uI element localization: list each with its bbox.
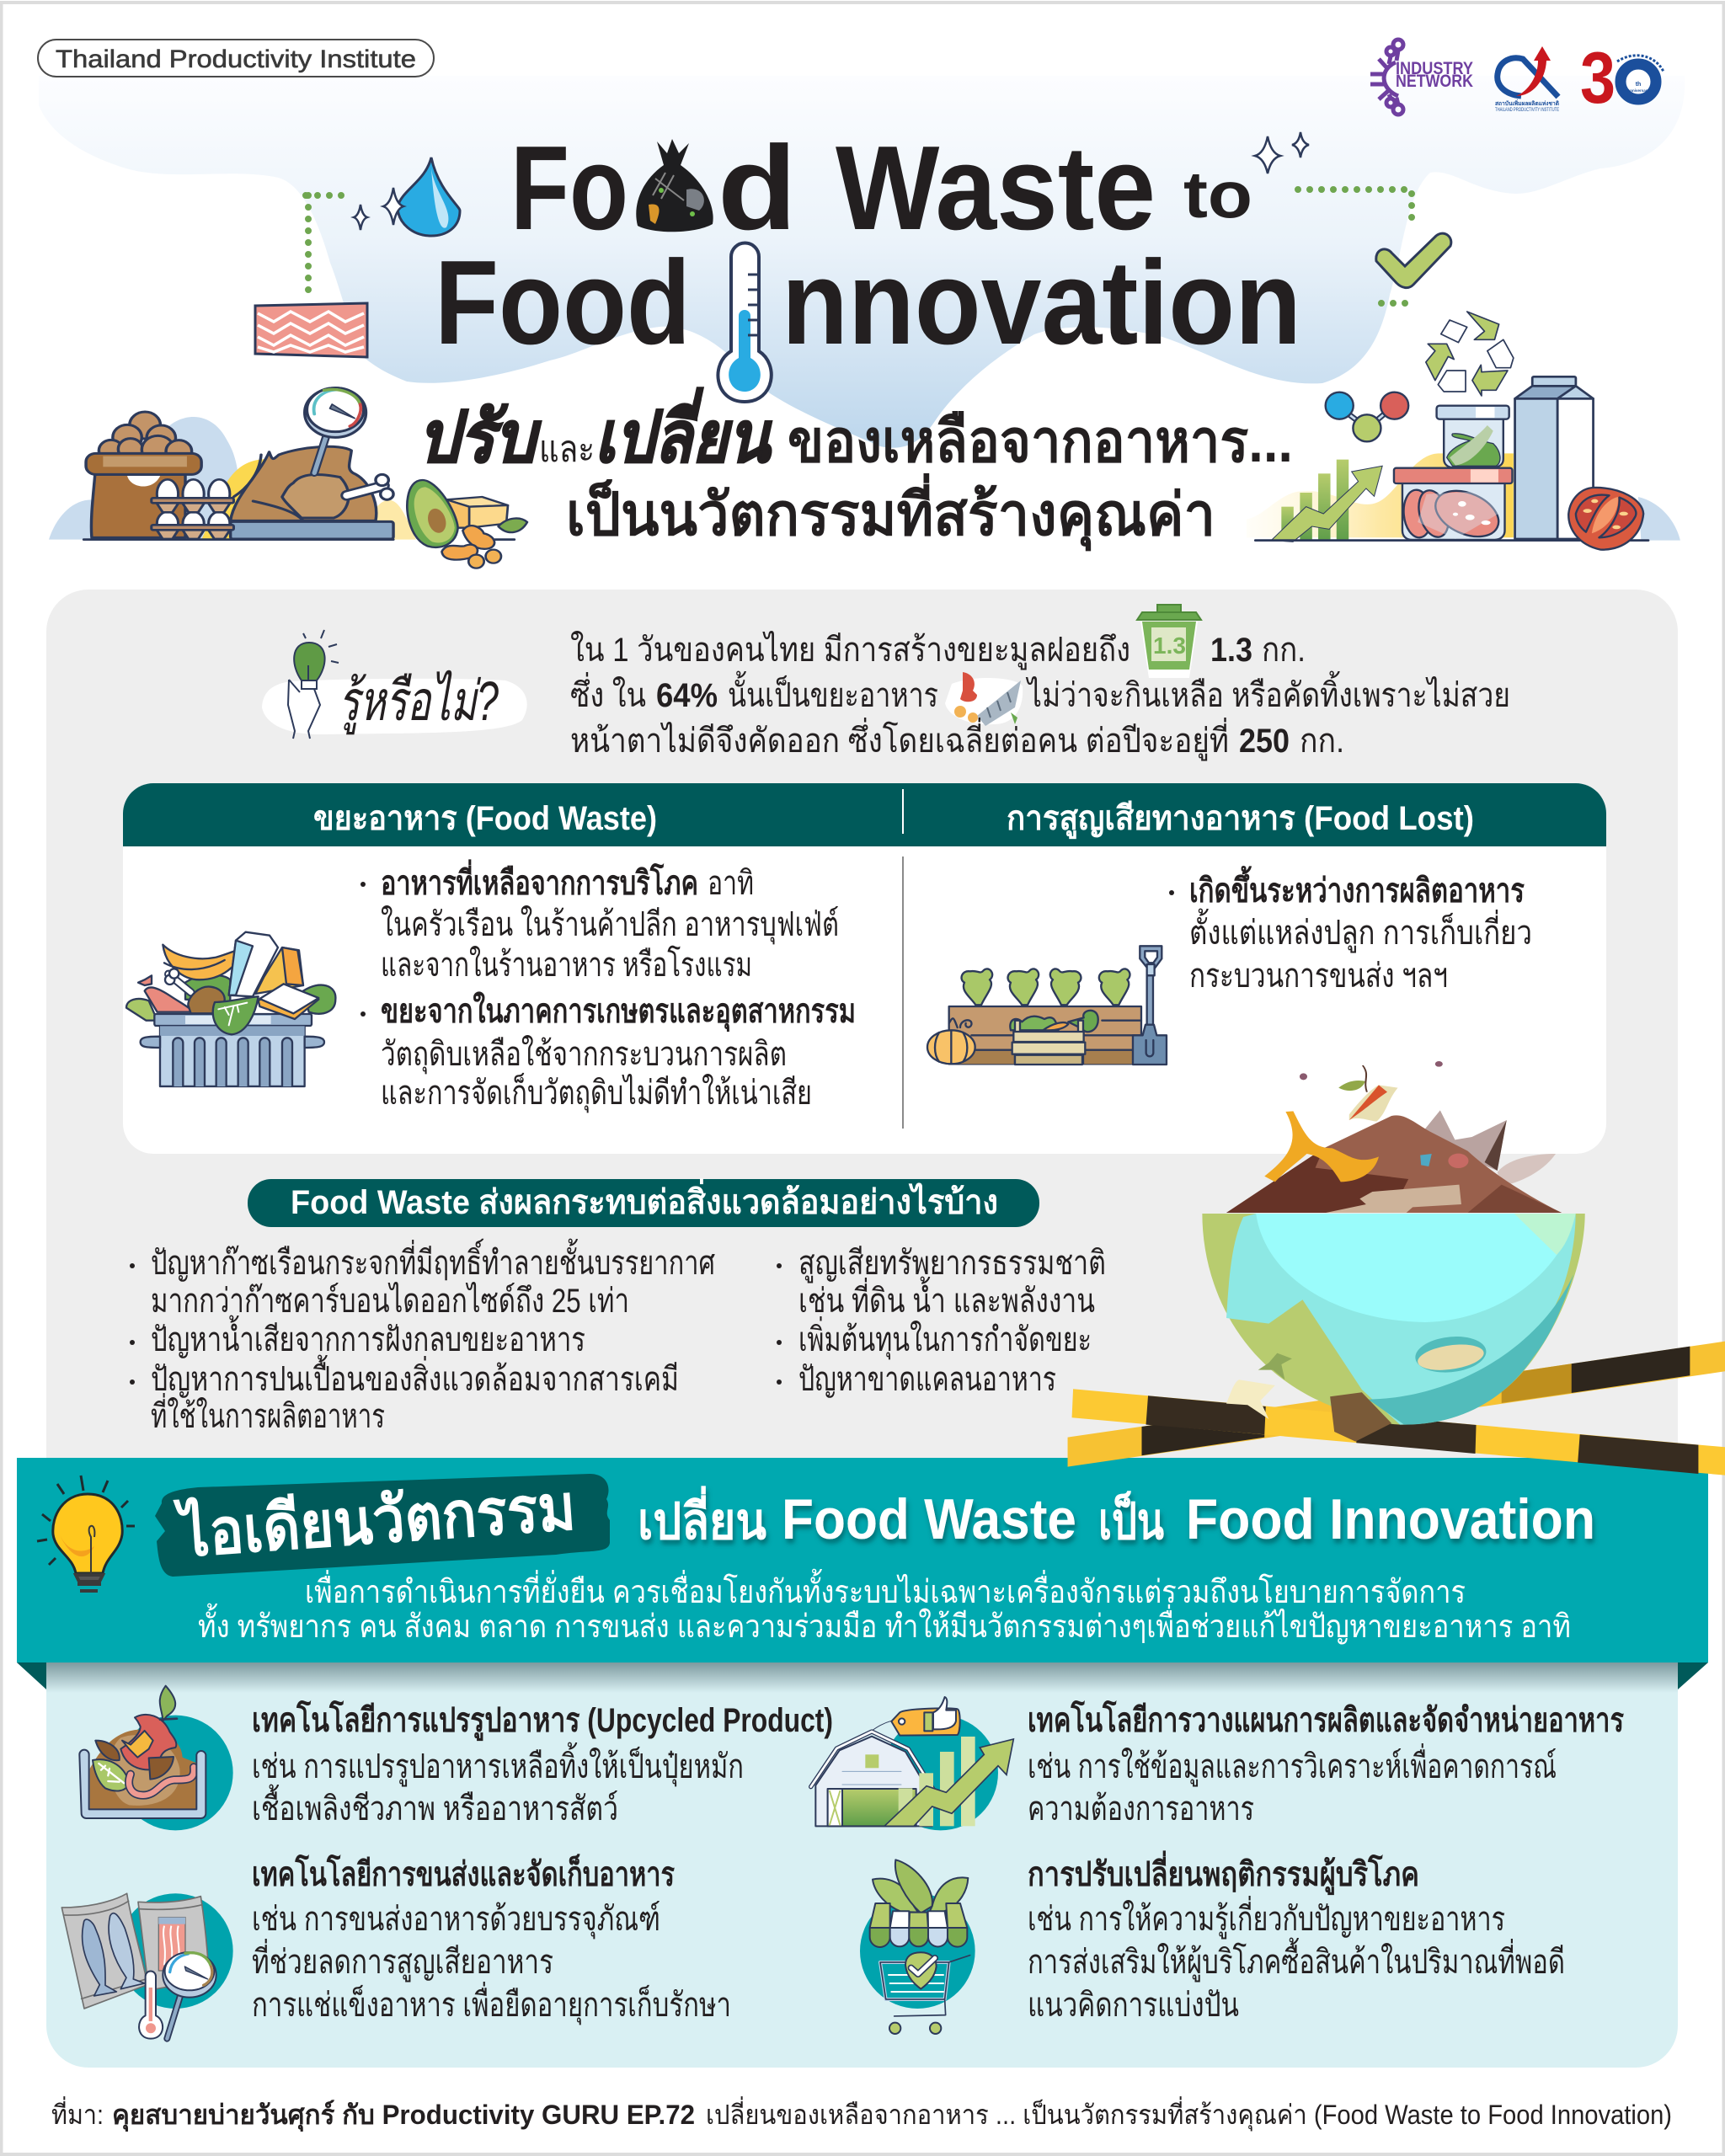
- headline thai line 1: ของเหลือจากอาหาร...: [788, 408, 1293, 474]
- impact list right: [777, 1245, 1106, 1398]
- fact line 3: กก.: [1300, 723, 1344, 760]
- bowl: [1202, 1214, 1585, 1442]
- icon: food scraps: [945, 672, 1023, 726]
- text: transport and storage: เทคโนโลยีการขนส่งและจัดเก็บอาหาร: [252, 1853, 675, 1893]
- title line 1: d: [718, 121, 797, 255]
- fact 1.3 kg: [1210, 632, 1306, 669]
- title line 1: Fo: [510, 121, 628, 255]
- text: upcycled product: [252, 1700, 833, 1828]
- did you know badge: รู้หรือไม่?: [339, 670, 499, 735]
- institute name pill: [38, 40, 434, 77]
- fact 1.3 kg: 1.3: [1210, 632, 1252, 669]
- fact line 2: 64%: [656, 677, 718, 714]
- title line 1: to: [1183, 157, 1252, 232]
- logo: industry network: INDUSTRY: [1396, 59, 1473, 78]
- logo: 30th anniversary: Anniversary: [1627, 88, 1650, 93]
- icon: sparkles top right: [1255, 132, 1309, 173]
- icon: compost tray: [79, 1686, 233, 1830]
- text: food waste definitions: วัตถุดิบเหลือใช้จากกระบวนการผลิต: [381, 1034, 787, 1075]
- panel: food waste vs food lost: [123, 783, 1606, 1154]
- fact line 3: 250: [1239, 723, 1290, 760]
- sack of grain: [86, 412, 201, 537]
- fact line 2: ซึ่ง ใน: [570, 672, 646, 714]
- egg tray: [152, 479, 233, 539]
- banner heading: เปลี่ยน: [638, 1486, 766, 1550]
- heading: food lost: การสูญเสียทางอาหาร (Food Lost): [1007, 800, 1474, 839]
- jar with sausage: [1394, 468, 1512, 546]
- teal banner: [17, 1458, 1708, 1662]
- dotted connector right: [1298, 189, 1417, 303]
- institute name pill: Thailand Productivity Institute: [56, 45, 416, 73]
- front chopstick: [1072, 1389, 1725, 1476]
- recycle symbol: [1426, 312, 1514, 396]
- icon: barn and growth: [811, 1697, 1013, 1830]
- headline thai line 2: เป็นนวัตกรรมที่สร้างคุณค่า: [566, 472, 1215, 552]
- banner heading: [638, 1486, 1595, 1551]
- source credit: [51, 2096, 1672, 2132]
- impact list right: เพิ่มต้นทุนในการกำจัดขยะ: [798, 1316, 1092, 1360]
- molecule: [1326, 392, 1408, 441]
- source credit: ที่มา:: [51, 2096, 104, 2130]
- logo: 30th anniversary: [1580, 38, 1664, 119]
- logo: thailand productivity institute: THAILAND PRODUCTIVITY INSTITUTE: [1495, 108, 1559, 113]
- text: consumer behavior: เช่น การให้ความรู้เกี่ยวกับปัญหาขยะอาหาร: [1028, 1896, 1505, 1939]
- scene: products on the right: [1247, 312, 1680, 550]
- impact list right: สูญเสียทรัพยากรธรรมชาติ: [798, 1245, 1106, 1283]
- banner body line 1: เพื่อการดำเนินการที่ยั่งยืน ควรเชื่อมโยงกันทั้งระบบไม่เฉพาะเครื่องจักรแต่รวมถึงนโยบายการจัดการ: [305, 1568, 1466, 1610]
- badge: innovation ideas: ไอเดียนวัตกรรม: [173, 1470, 578, 1571]
- fact line 3: หน้าตาไม่ดีจึงคัดออก ซึ่งโดยเฉลี่ยต่อคน ต่อปีจะอยู่ที่: [570, 718, 1229, 760]
- icon: packaged fish and gauge: [61, 1893, 233, 2039]
- text: food waste definitions: อาหารที่เหลือจากการบริโภค: [381, 859, 698, 902]
- impact list left: ปัญหาก๊าซเรือนกระจกที่มีฤทธิ์ทำลายชั้นบรรยากาศ: [151, 1238, 715, 1282]
- text: upcycled product: เช่น การแปรรูปอาหารเหลือทิ้งให้เป็นปุ๋ยหมัก: [252, 1742, 744, 1787]
- impact list left: ที่ใช้ในการผลิตอาหาร: [151, 1393, 385, 1435]
- source credit: คุยสบายบ่ายวันศุกร์ กับ Productivity GURU EP.72: [112, 2100, 695, 2132]
- scene: food on the left: [49, 388, 527, 568]
- headline thai line 1: เปลี่ยน: [595, 387, 772, 477]
- text: food waste definitions: และจากในร้านอาหาร หรือโรงแรม: [381, 945, 752, 984]
- icon: water drop and sparkles: [354, 157, 460, 236]
- back chopstick: [1068, 1342, 1725, 1467]
- logo: 30th anniversary: th: [1636, 82, 1641, 88]
- text: transport and storage: การแช่แข็งอาหาร เพื่อยืดอายุการเก็บรักษา: [252, 1982, 731, 2025]
- text: production planning: [1028, 1700, 1624, 1828]
- text: transport and storage: [252, 1853, 731, 2025]
- did you know badge: [262, 630, 527, 739]
- fact 1.3 kg: กก.: [1262, 632, 1306, 669]
- growth chart: [1271, 460, 1382, 542]
- impact list left: มากกว่าก๊าซคาร์บอนไดออกไซด์ถึง 25 เท่า: [151, 1282, 629, 1320]
- text: consumer behavior: [1028, 1850, 1565, 2024]
- illustration: earth bowl with food waste and chopsticks: [1068, 1061, 1725, 1476]
- dotted connector left: [306, 195, 344, 291]
- icon: garbage bag: [636, 139, 713, 232]
- text: food lost definition: [1169, 866, 1532, 995]
- impact list right: เช่น ที่ดิน น้ำ และพลังงาน: [798, 1276, 1095, 1320]
- banner heading: Food Waste: [782, 1487, 1076, 1551]
- milk carton: [1515, 376, 1594, 539]
- text: food lost definition: เกิดขึ้นระหว่างการผลิตอาหาร: [1189, 866, 1525, 910]
- impact list left: ปัญหาการปนเปื้อนของสิ่งแวดล้อมจากสารเคมี: [151, 1354, 679, 1398]
- text: food waste definitions: ในครัวเรือน ในร้านค้าปลีก อาหารบุฟเฟ่ต์: [381, 905, 839, 945]
- text: transport and storage: ที่ช่วยลดการสูญเสียอาหาร: [252, 1939, 553, 1982]
- text: consumer behavior: การส่งเสริมให้ผู้บริโภคซื้อสินค้าในปริมาณที่พอดี: [1028, 1937, 1565, 1982]
- fact line 1: ใน 1 วันของคนไทย มีการสร้างขยะมูลฝอยถึง: [570, 630, 1130, 670]
- logo: industry network: NETWORK: [1396, 72, 1473, 91]
- headline thai line 1: ปรับ: [418, 398, 542, 477]
- banner heading: Food Innovation: [1186, 1487, 1595, 1551]
- text: production planning: ความต้องการอาหาร: [1028, 1790, 1254, 1828]
- heading: food waste: ขยะอาหาร (Food Waste): [313, 800, 657, 837]
- logo: 30th anniversary: 3: [1580, 38, 1616, 119]
- pile of waste: [1226, 1061, 1562, 1213]
- icon: vegetable planter: [927, 946, 1167, 1065]
- jar with lettuce: [1437, 406, 1509, 467]
- title line 1: Waste: [836, 121, 1156, 255]
- heading pill: environmental impact: Food Waste ส่งผลกระทบต่อสิ่งแวดล้อมอย่างไรบ้าง: [291, 1178, 998, 1221]
- title line 2: [435, 236, 1301, 370]
- text: upcycled product: เทคโนโลยีการแปรรูปอาหาร (Upcycled Product): [252, 1700, 833, 1741]
- icon: food in trash can: [126, 932, 335, 1086]
- header background cloud: [39, 76, 1685, 448]
- impact list left: [130, 1238, 715, 1435]
- fact line 2 continued: ไม่ว่าจะกินเหลือ หรือคัดทิ้งเพราะไม่สวย: [1025, 670, 1510, 714]
- title line 2: Food: [435, 236, 691, 370]
- roast chicken on tray: [231, 388, 393, 539]
- text: food waste definitions: ขยะจากในภาคการเกษตรและอุตสาหกรรม: [381, 991, 856, 1033]
- logo: thailand productivity institute: [1495, 46, 1559, 113]
- icon: light bulb: [37, 1476, 135, 1591]
- icon: check mark: [1376, 233, 1451, 288]
- tomato: [1568, 488, 1643, 550]
- text: food waste definitions: [360, 859, 856, 1113]
- impact list right: ปัญหาขาดแคลนอาหาร: [798, 1361, 1056, 1398]
- text: transport and storage: เช่น การขนส่งอาหารด้วยบรรจุภัณฑ์: [252, 1900, 660, 1940]
- text: food waste definitions: อาทิ: [708, 865, 754, 902]
- text: food lost definition: ตั้งแต่แหล่งปลูก การเก็บเกี่ยว: [1189, 908, 1532, 953]
- text: food lost definition: กระบวนการขนส่ง ฯลฯ: [1189, 958, 1448, 995]
- logo: thailand productivity institute: สถาบันเพิ่มผลผลิตแห่งชาติ: [1495, 99, 1559, 107]
- logo: industry network: [1370, 40, 1473, 115]
- panel: innovation ideas: [17, 1662, 1708, 2068]
- headline thai line 1: [418, 387, 1293, 477]
- text: production planning: เช่น การใช้ข้อมูลและการวิเคราะห์เพื่อคาดการณ์: [1028, 1743, 1557, 1786]
- icon: green bin: [1137, 605, 1201, 678]
- text: consumer behavior: การปรับเปลี่ยนพฤติกรรมผู้บริโภค: [1028, 1850, 1419, 1895]
- icon: meat card: [255, 303, 367, 357]
- impact list left: ปัญหาน้ำเสียจากการฝังกลบขยะอาหาร: [151, 1315, 585, 1358]
- icon: green bin: 1.3: [1153, 632, 1186, 659]
- banner heading: เป็น: [1098, 1491, 1164, 1550]
- icon: shop and cart: [860, 1860, 975, 2034]
- fact line 2: [570, 670, 938, 714]
- text: consumer behavior: แนวคิดการแบ่งปัน: [1028, 1987, 1239, 2024]
- text: upcycled product: เชื้อเพลิงชีวภาพ หรืออาหารสัตว์: [252, 1784, 618, 1828]
- text: food waste definitions: และการจัดเก็บวัตถุดิบไม่ดีทำให้เน่าเสีย: [381, 1072, 812, 1113]
- panel: did you know and food waste facts: [46, 590, 1678, 1516]
- headline thai line 1: และ: [539, 429, 595, 470]
- fact line 2: นั้นเป็นขยะอาหาร: [728, 670, 938, 714]
- title line 2: nnovation: [782, 236, 1301, 370]
- butter, avocado, peanuts: [407, 480, 527, 568]
- icon: thermometer: [718, 243, 772, 402]
- title line 1: [510, 121, 1252, 255]
